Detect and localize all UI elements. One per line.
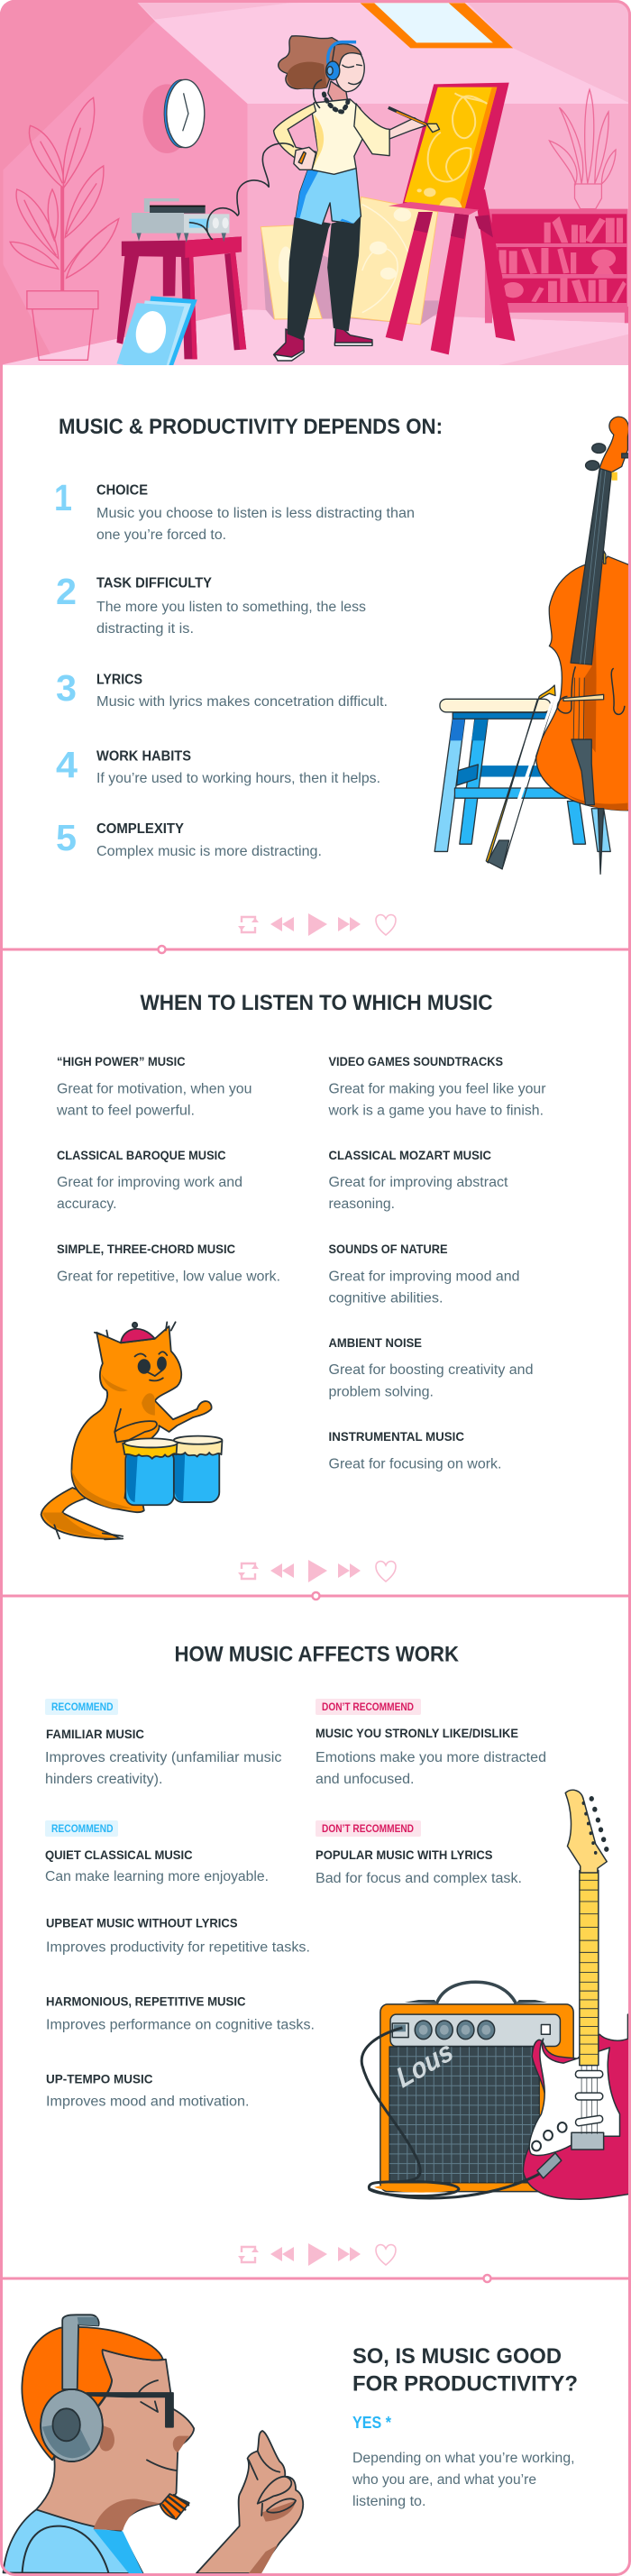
progress dot 1 <box>159 946 166 953</box>
heading: HOW MUSIC AFFECTS WORK <box>175 1643 460 1666</box>
badge do not recommend 2 <box>316 1820 421 1837</box>
item three chord <box>57 1242 280 1284</box>
item high power <box>56 1054 252 1118</box>
item familiar music: hinders creativity). <box>45 1772 162 1787</box>
icon: stool and record player <box>116 198 246 359</box>
badge recommend 1 <box>45 1699 118 1715</box>
item ambient: AMBIENT NOISE <box>328 1335 422 1350</box>
item mozart: Great for improving abstract <box>328 1175 508 1190</box>
item 2 task difficulty: 2 <box>56 571 77 612</box>
player controls 3 <box>238 2243 396 2266</box>
body text <box>352 2451 575 2509</box>
item like dislike: MUSIC YOU STRONLY LIKE/DISLIKE <box>316 1726 518 1740</box>
item 3 lyrics: LYRICS <box>96 673 142 687</box>
item quiet classical <box>45 1847 269 1884</box>
icon: wall clock <box>142 79 205 153</box>
item 4 work habits: 4 <box>56 744 78 785</box>
item instrumental: Great for focusing on work. <box>328 1457 501 1471</box>
item 5 complexity <box>56 817 322 859</box>
item familiar music: Improves creativity (unfamiliar music <box>45 1750 282 1765</box>
heading: SO, IS MUSIC GOOD <box>352 2344 562 2369</box>
heading <box>352 2344 578 2397</box>
item baroque: Great for improving work and <box>57 1175 242 1190</box>
badge do not recommend 2: DON’T RECOMMEND <box>322 1822 414 1835</box>
item baroque <box>57 1148 242 1212</box>
item high power: want to feel powerful. <box>56 1104 195 1118</box>
woman character <box>189 36 440 361</box>
item 5 complexity: 5 <box>56 817 77 858</box>
item video games: work is a game you have to finish. <box>327 1104 544 1118</box>
item nature: Great for improving mood and <box>328 1270 519 1284</box>
item 5 complexity: COMPLEXITY <box>96 821 185 837</box>
icon: amplifier and electric guitar: Lous <box>392 2035 458 2095</box>
item popular lyrics <box>316 1847 522 1886</box>
icon: cat playing bongos <box>41 1322 222 1539</box>
item upbeat: UPBEAT MUSIC WITHOUT LYRICS <box>46 1915 238 1930</box>
item familiar music <box>45 1727 282 1787</box>
item up tempo: Improves mood and motivation. <box>46 2094 249 2110</box>
heading: MUSIC & PRODUCTIVITY DEPENDS ON: <box>59 415 443 439</box>
section 1 panel: music and productivity depends on <box>54 415 443 859</box>
body text: Depending on what you’re working, <box>352 2451 575 2466</box>
badge recommend 2 <box>45 1820 118 1837</box>
item ambient: problem solving. <box>328 1385 434 1399</box>
item mozart <box>328 1148 508 1212</box>
item high power: Great for motivation, when you <box>57 1082 252 1096</box>
badge do not recommend 1 <box>316 1699 421 1715</box>
item like dislike: Emotions make you more distracted <box>316 1750 546 1765</box>
item three chord: SIMPLE, THREE-CHORD MUSIC <box>57 1242 235 1256</box>
item nature: cognitive abilities. <box>328 1291 444 1306</box>
body text: listening to. <box>352 2494 425 2509</box>
item quiet classical: Can make learning more enjoyable. <box>45 1869 269 1884</box>
player controls 1 <box>238 913 396 936</box>
icon: skylight <box>361 3 513 48</box>
item 4 work habits: If you’re used to working hours, then it helps. <box>96 771 380 786</box>
item 1 choice: Music you choose to listen is less distracting than <box>96 506 415 521</box>
item 3 lyrics <box>56 667 388 710</box>
item 2 task difficulty: TASK DIFFICULTY <box>96 575 213 591</box>
item instrumental: INSTRUMENTAL MUSIC <box>328 1429 464 1444</box>
icon: album sleeves on floor <box>116 296 197 372</box>
item 3 lyrics: Music with lyrics makes concetration difficult. <box>96 694 388 710</box>
item video games: Great for making you feel like your <box>328 1082 546 1096</box>
section 3 panel: how music affects work <box>45 1643 546 2110</box>
item like dislike <box>316 1726 546 1787</box>
item instrumental <box>328 1429 501 1471</box>
item nature: SOUNDS OF NATURE <box>328 1242 447 1256</box>
badge recommend 2: RECOMMEND <box>51 1822 114 1835</box>
item 2 task difficulty: distracting it is. <box>96 621 194 637</box>
item 1 choice <box>54 477 415 543</box>
hero illustration: woman painting in attic studio <box>0 0 631 374</box>
item 1 choice: one you’re forced to. <box>96 527 226 543</box>
icon: canvases leaning on wall <box>261 197 439 325</box>
heading: WHEN TO LISTEN TO WHICH MUSIC <box>141 991 492 1015</box>
icon: left plant outline <box>10 97 119 360</box>
item 2 task difficulty: The more you listen to something, the less <box>96 600 366 615</box>
item harmonious <box>46 1994 315 2032</box>
section 4 panel: conclusion <box>352 2344 578 2509</box>
item ambient: Great for boosting creativity and <box>328 1362 534 1378</box>
icon: easel with painting <box>386 83 515 354</box>
item harmonious: Improves performance on cognitive tasks. <box>46 2018 315 2032</box>
badge recommend 1: RECOMMEND <box>51 1701 114 1713</box>
item harmonious: HARMONIOUS, REPETITIVE MUSIC <box>46 1994 245 2009</box>
item high power: “HIGH POWER” MUSIC <box>57 1054 186 1068</box>
item 1 choice: CHOICE <box>96 483 148 498</box>
item mozart: CLASSICAL MOZART MUSIC <box>328 1148 491 1162</box>
item 4 work habits <box>56 744 380 786</box>
body text: who you are, and what you’re <box>352 2472 536 2488</box>
item 5 complexity: Complex music is more distracting. <box>96 844 322 859</box>
item nature <box>328 1242 519 1306</box>
item quiet classical: QUIET CLASSICAL MUSIC <box>45 1847 193 1862</box>
item familiar music: FAMILIAR MUSIC <box>46 1727 144 1741</box>
item up tempo <box>46 2072 249 2110</box>
item video games: VIDEO GAMES SOUNDTRACKS <box>328 1054 503 1068</box>
progress dot 3 <box>483 2275 490 2282</box>
item upbeat: Improves productivity for repetitive tasks. <box>46 1940 310 1955</box>
item ambient <box>328 1335 534 1399</box>
icon: amplifier and electric guitar <box>361 1790 631 2199</box>
item baroque: CLASSICAL BAROQUE MUSIC <box>57 1148 225 1162</box>
item up tempo: UP-TEMPO MUSIC <box>46 2072 153 2086</box>
item 4 work habits: WORK HABITS <box>96 748 191 765</box>
item popular lyrics: Bad for focus and complex task. <box>316 1871 522 1886</box>
item like dislike: and unfocused. <box>316 1772 415 1787</box>
item popular lyrics: POPULAR MUSIC WITH LYRICS <box>316 1847 492 1862</box>
item video games <box>327 1054 546 1118</box>
progress dot 2 <box>312 1592 319 1600</box>
item mozart: reasoning. <box>328 1196 395 1212</box>
answer: YES * <box>352 2414 391 2432</box>
item 1 choice: 1 <box>54 477 72 518</box>
icon: bookshelf <box>485 209 628 323</box>
badge do not recommend 1: DON’T RECOMMEND <box>322 1701 414 1713</box>
item baroque: accuracy. <box>57 1196 117 1212</box>
icon: man with headphones <box>4 2315 303 2573</box>
item 3 lyrics: 3 <box>56 667 77 709</box>
icon: right plant outline <box>549 89 616 209</box>
item 2 task difficulty <box>56 571 366 637</box>
section 2 panel: when to listen to which music <box>56 991 546 1471</box>
item three chord: Great for repetitive, low value work. <box>57 1270 280 1284</box>
heading: FOR PRODUCTIVITY? <box>352 2371 578 2397</box>
icon: cello on blue stool <box>434 417 631 874</box>
item upbeat <box>46 1915 310 1955</box>
player controls 2 <box>238 1560 396 1582</box>
